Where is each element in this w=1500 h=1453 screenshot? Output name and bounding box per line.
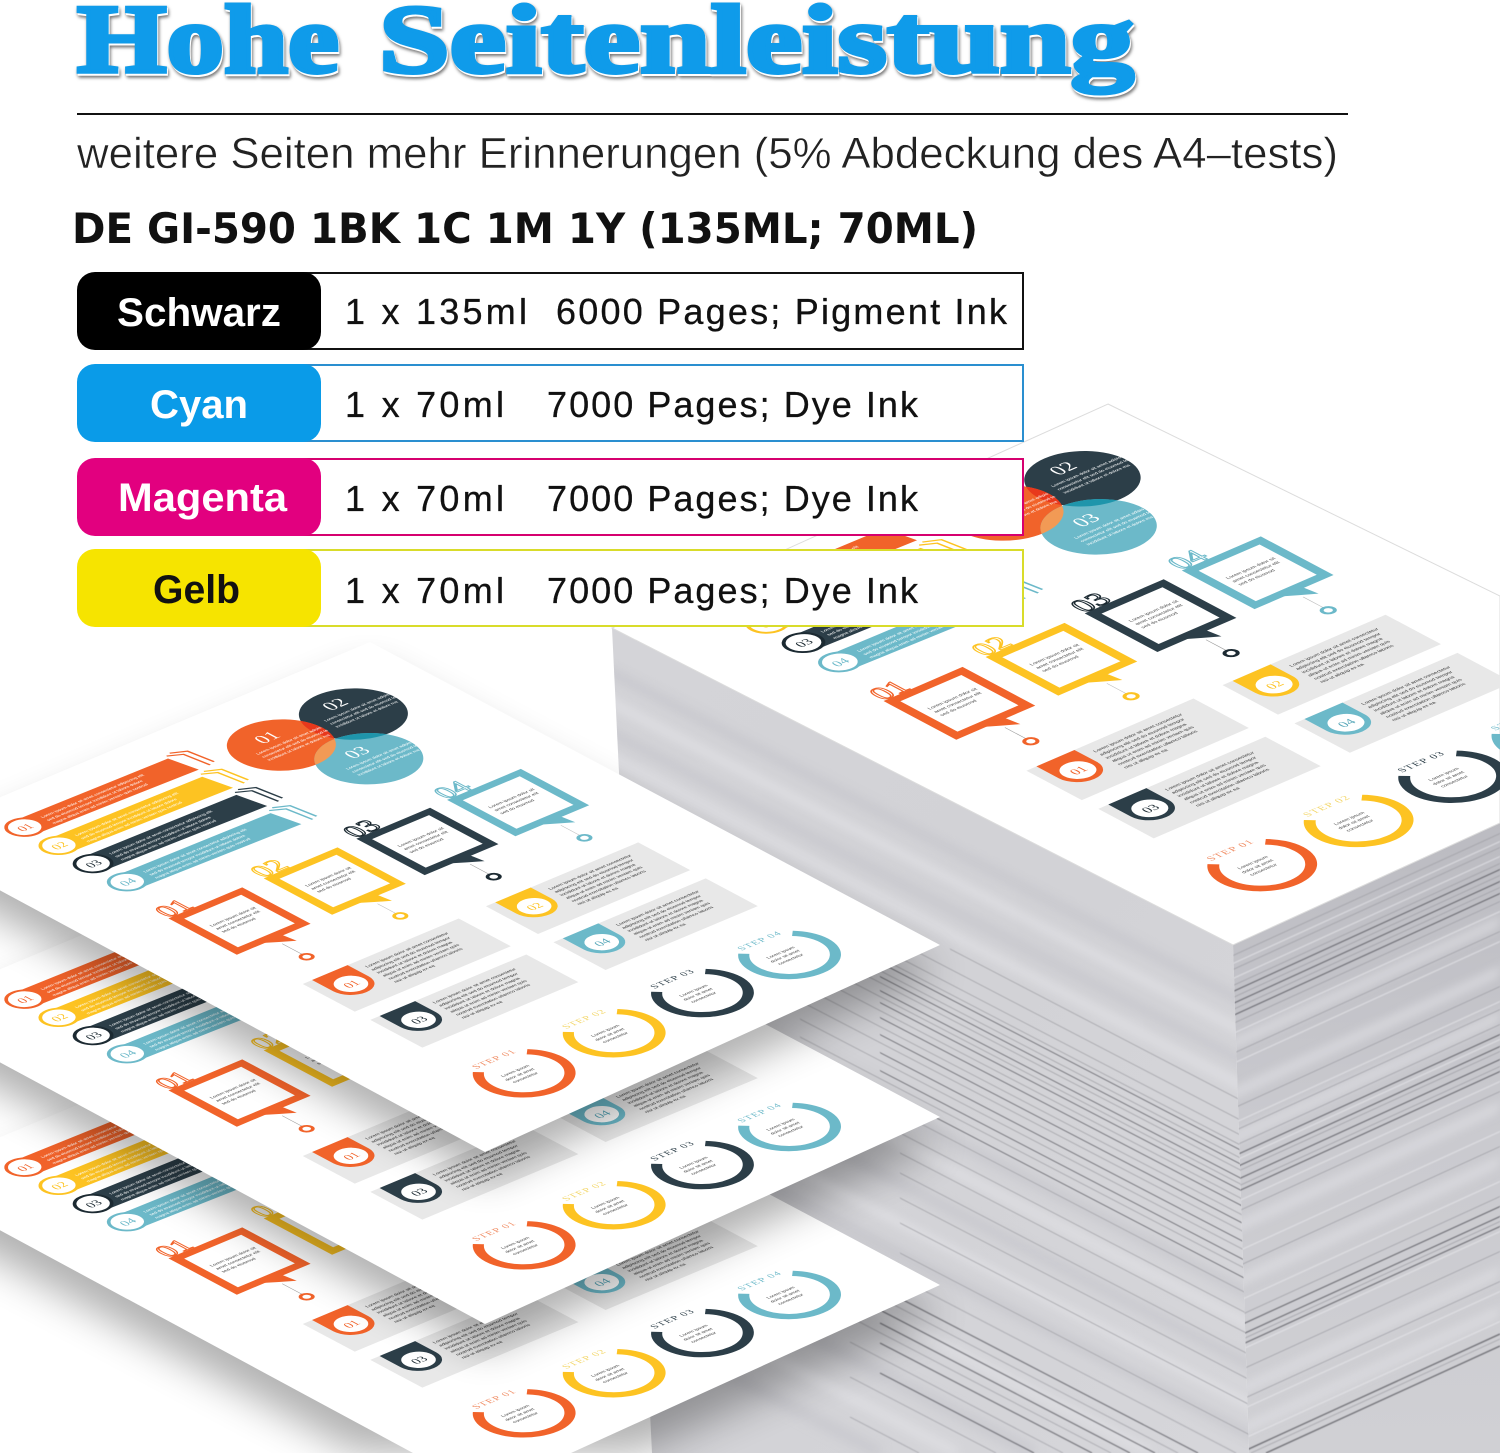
info box 01: nostrud exercitation ullamco laboris [387, 947, 465, 981]
frame 02 [243, 838, 437, 934]
ring step 01: consectetur [511, 1071, 541, 1084]
row: Gelb [77, 549, 1023, 627]
info box 01: aliqua ut enim ad minim veniam quis [381, 943, 462, 978]
venn diagram [204, 677, 485, 809]
info box 03: nisi ut aliquip ex ea [460, 1000, 505, 1020]
ring step 02: dolor sit amet [594, 1027, 627, 1042]
row: Magenta: 7000 Pages; Dye Ink [547, 478, 919, 519]
frame 01: amet consectetur elit [214, 910, 263, 931]
venn diagram: Lorem ipsum dolor sit amet adipis [255, 726, 324, 755]
shadow cast by middle sheet on bottom sheet [0, 1062, 942, 1368]
ring step 03: STEP 03 [648, 968, 698, 990]
band 04 [99, 801, 318, 896]
row: Schwarz: 1 x 135ml [345, 291, 527, 332]
model heading: DE GI-590 1BK 1C 1M 1Y (135ML; 70ML) [72, 204, 978, 253]
ring step 01: dolor sit amet [504, 1067, 537, 1082]
band 04: Lorem ipsum dolor sit amet consectetur adipiscing elit [142, 828, 249, 873]
frame 02: Lorem ipsum dolor sit [304, 866, 354, 888]
paper stack: right face [1230, 820, 1500, 1453]
venn diagram: consectetur elit sed do eiusmod te [260, 729, 330, 758]
info box 01: Lorem ipsum dolor sit amet consectetur [364, 932, 451, 969]
info box 04: aliqua ut enim ad minim veniam quis [632, 901, 713, 936]
ring step 03 [636, 961, 767, 1024]
info box 04 [553, 878, 758, 970]
row: Cyan [77, 364, 1023, 442]
info box 02: Lorem ipsum dolor sit amet consectetur [547, 854, 634, 891]
ring step 04: STEP 04 [735, 930, 785, 952]
ring step 04: Lorem ipsum [765, 946, 797, 960]
info box 02: adipiscing elit sed do eiusmod tempor [553, 858, 636, 894]
ring step 02: consectetur [601, 1031, 631, 1044]
band 03: Lorem ipsum dolor sit amet consectetur adipiscing elit [108, 810, 214, 855]
venn diagram: incididunt ut labore et dolore ma [334, 700, 400, 728]
ring step 03: consectetur [689, 991, 719, 1004]
band 01: sed do eiusmod tempor incididunt ut labore dolore [45, 779, 145, 822]
row: Gelb: 1 x 70ml [345, 570, 504, 611]
frame 04: amet consectetur elit [493, 791, 541, 812]
info box 03: 03 [407, 1014, 431, 1026]
info box 04: Lorem ipsum dolor sit amet consectetur [615, 890, 702, 927]
frame 03: amet consectetur elit [402, 830, 451, 851]
title [77, 0, 1134, 94]
venn diagram: 02 [318, 696, 354, 713]
info box 02: 02 [523, 901, 547, 912]
info box 03: aliqua ut enim ad minim veniam quis [449, 979, 530, 1014]
frame 03: sed do eiusmod [408, 838, 446, 854]
frame 03: 03 [336, 816, 389, 842]
ring step 01: Lorem ipsum [500, 1064, 532, 1078]
venn diagram: 01 [250, 729, 286, 746]
info box 03 [370, 954, 578, 1048]
ring step 01: STEP 01 [470, 1048, 520, 1071]
band 04: 04 [116, 876, 141, 888]
frame 02: sed do eiusmod [315, 877, 353, 894]
band 01: Lorem ipsum dolor sit amet consectetur adipiscing elit [39, 773, 146, 819]
info box 01: nisi ut aliquip ex ea [392, 964, 437, 984]
info box 02: incididunt ut labore et dolore magna [559, 863, 638, 897]
info box 04: nisi ut aliquip ex ea [643, 923, 688, 942]
info box 01: 01 [340, 979, 364, 990]
shadow on white background below bottom sheet [0, 1230, 942, 1453]
row: Magenta: 1 x 70ml [345, 478, 504, 519]
row: Schwarz: Schwarz [117, 291, 281, 335]
band 03: 03 [82, 858, 106, 870]
ring step 04: dolor sit amet [769, 949, 803, 964]
info box 03: adipiscing elit sed do eiusmod tempor [437, 972, 521, 1008]
info box 01: adipiscing elit sed do eiusmod tempor [370, 936, 453, 972]
row: Gelb: 7000 Pages; Dye Ink [547, 570, 919, 611]
ring step 04: consectetur [777, 953, 806, 966]
frame 04: 04 [426, 778, 480, 803]
ring step 03: dolor sit amet [682, 987, 716, 1002]
info box 04: incididunt ut labore et dolore magna [626, 899, 706, 933]
frame 03 [336, 799, 530, 894]
ring step 04 [723, 923, 854, 985]
ring step 02: Lorem ipsum [590, 1024, 622, 1038]
band 01 [0, 747, 216, 842]
venn diagram: 03 [340, 744, 376, 761]
divider line [77, 113, 1348, 115]
venn diagram: incididunt ut labore et dolore ma [266, 733, 332, 761]
front printed sheet [0, 642, 940, 1152]
frame 02: 02 [243, 856, 296, 881]
paper stack: left face [600, 620, 1260, 1453]
info box 02: aliqua ut enim ad minim veniam quis [564, 865, 645, 900]
ring step 02 [547, 1002, 679, 1064]
band 01: magna aliqua enim ad minim veniam quis nostrud [51, 783, 150, 825]
frame 03: Lorem ipsum dolor sit [396, 826, 447, 848]
ring step 01 [457, 1042, 589, 1104]
row: Cyan: 1 x 70ml [345, 384, 504, 425]
row: Schwarz: 6000 Pages; Pigment Ink [556, 291, 1008, 332]
info box 02: nostrud exercitation ullamco laboris [570, 869, 649, 903]
band 04: magna aliqua enim ad minim veniam quis nostrud [153, 837, 252, 879]
bottom printed sheet [0, 1110, 940, 1453]
band 02: Lorem ipsum dolor sit amet consectetur adipiscing elit [74, 791, 180, 837]
venn diagram: consectetur elit sed do eiusmod te [350, 744, 420, 773]
info box 04: 04 [590, 937, 615, 948]
info box 01: incididunt ut labore et dolore magna [375, 941, 455, 975]
venn diagram: Lorem ipsum dolor sit amet adipis [323, 693, 392, 722]
info box 02: nisi ut aliquip ex ea [576, 887, 621, 906]
subtitle: weitere Seiten mehr Erinnerungen (5% Abdeckung des A4–tests) [76, 129, 1338, 178]
info box 02 [486, 842, 690, 934]
sheet artwork [0, 675, 878, 1104]
row: Cyan: Cyan [150, 383, 248, 427]
info box 04: nostrud exercitation ullamco laboris [638, 905, 716, 939]
row: Magenta: Magenta [118, 476, 288, 520]
band 02: sed do eiusmod tempor incididunt ut labore dolore [79, 797, 179, 840]
info box 03: nostrud exercitation ullamco laboris [454, 983, 533, 1017]
venn diagram: incididunt ut labore et dolore ma [356, 748, 422, 776]
ring step 02: STEP 02 [560, 1008, 610, 1030]
band 02: magna aliqua enim ad minim veniam quis nostrud [85, 801, 184, 843]
frame 04 [426, 760, 621, 855]
frame 01: Lorem ipsum dolor sit [209, 906, 259, 928]
info box 04: adipiscing elit sed do eiusmod tempor [620, 894, 704, 930]
info box 03: Lorem ipsum dolor sit amet consectetur [432, 967, 518, 1005]
ring step 03: Lorem ipsum [678, 984, 710, 998]
band 03: magna aliqua enim ad minim veniam quis nostrud [119, 819, 218, 861]
top sheet of the stack [612, 404, 1500, 945]
band 03 [65, 783, 284, 878]
band 03: sed do eiusmod tempor incididunt ut labore dolore [113, 816, 213, 858]
row: Gelb: Gelb [153, 568, 240, 612]
info box 01 [303, 919, 511, 1012]
row: Magenta [77, 458, 1023, 536]
row: Schwarz [77, 272, 1023, 350]
middle printed sheet [0, 938, 940, 1324]
shadow cast by front sheet on middle sheet [0, 890, 942, 1196]
venn diagram: consectetur elit sed do eiusmod te [328, 695, 398, 725]
band 02 [31, 765, 250, 860]
frame 01: sed do eiusmod [220, 917, 258, 934]
frame 01 [148, 878, 343, 974]
row: Cyan: 7000 Pages; Dye Ink [547, 384, 919, 425]
info box 03: incididunt ut labore et dolore magna [443, 977, 522, 1011]
frame 04: sed do eiusmod [499, 799, 537, 815]
frame 01: 01 [148, 896, 201, 921]
band 02: 02 [48, 840, 72, 851]
frame 02: amet consectetur elit [310, 870, 358, 891]
venn diagram: Lorem ipsum dolor sit amet adipis [345, 741, 413, 770]
frame 04: Lorem ipsum dolor sit [487, 788, 537, 809]
band 04: sed do eiusmod tempor incididunt ut labore dolore [148, 834, 247, 876]
band 01: 01 [13, 822, 37, 833]
